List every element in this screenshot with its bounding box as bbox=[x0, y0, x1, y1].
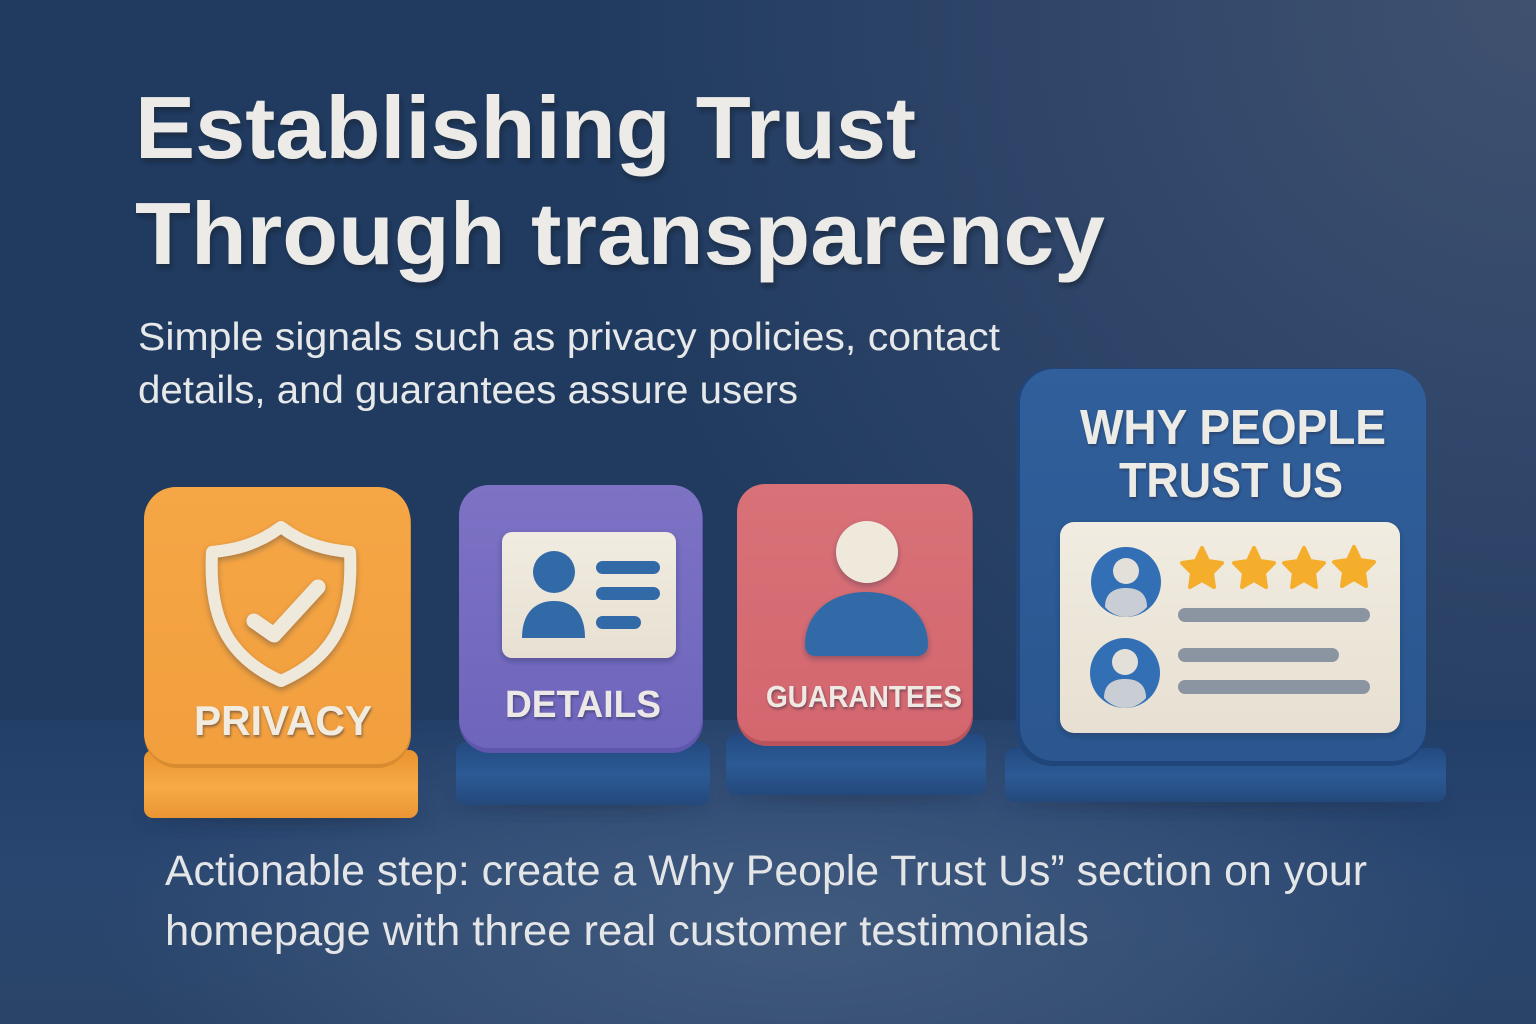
floor bbox=[0, 720, 1536, 1024]
privacy label: PRIVACY bbox=[194, 697, 372, 744]
trust base bbox=[1005, 748, 1446, 802]
guarantees label: GUARANTEES bbox=[766, 679, 962, 714]
actionable step text: Actionable step: create a Why People Trust Us” section on your bbox=[165, 847, 1367, 895]
trust heading bbox=[1080, 401, 1386, 508]
icon: id card bbox=[502, 532, 676, 658]
text lines bbox=[1178, 648, 1370, 694]
details label: DETAILS bbox=[505, 684, 661, 726]
title bbox=[135, 78, 1105, 283]
stars rating bbox=[1182, 547, 1374, 587]
actionable step text: homepage with three real customer testimonials bbox=[165, 907, 1089, 955]
privacy base bbox=[144, 750, 418, 818]
subtitle bbox=[138, 316, 1000, 412]
avatar 2 bbox=[1090, 638, 1160, 708]
background wall bbox=[0, 0, 1536, 722]
guarantees base bbox=[726, 734, 986, 795]
avatar 1 bbox=[1091, 547, 1161, 617]
trust heading: WHY PEOPLE bbox=[1080, 401, 1386, 455]
icon: person bbox=[805, 521, 928, 656]
subtitle: details, and guarantees assure users bbox=[138, 369, 798, 412]
icon: shield with check bbox=[212, 527, 350, 681]
panel: why people trust us bbox=[1005, 368, 1446, 807]
actionable step text bbox=[165, 847, 1367, 955]
title: Through transparency bbox=[135, 184, 1105, 283]
subtitle: Simple signals such as privacy policies, contact bbox=[138, 316, 1000, 359]
trust heading: TRUST US bbox=[1119, 454, 1343, 508]
panel: guarantees bbox=[726, 484, 986, 799]
testimonial card bbox=[1060, 522, 1400, 733]
details base bbox=[456, 742, 710, 805]
title: Establishing Trust bbox=[135, 78, 916, 177]
panel: privacy bbox=[144, 487, 425, 823]
panel: details bbox=[456, 485, 710, 809]
text line bbox=[1178, 608, 1370, 622]
